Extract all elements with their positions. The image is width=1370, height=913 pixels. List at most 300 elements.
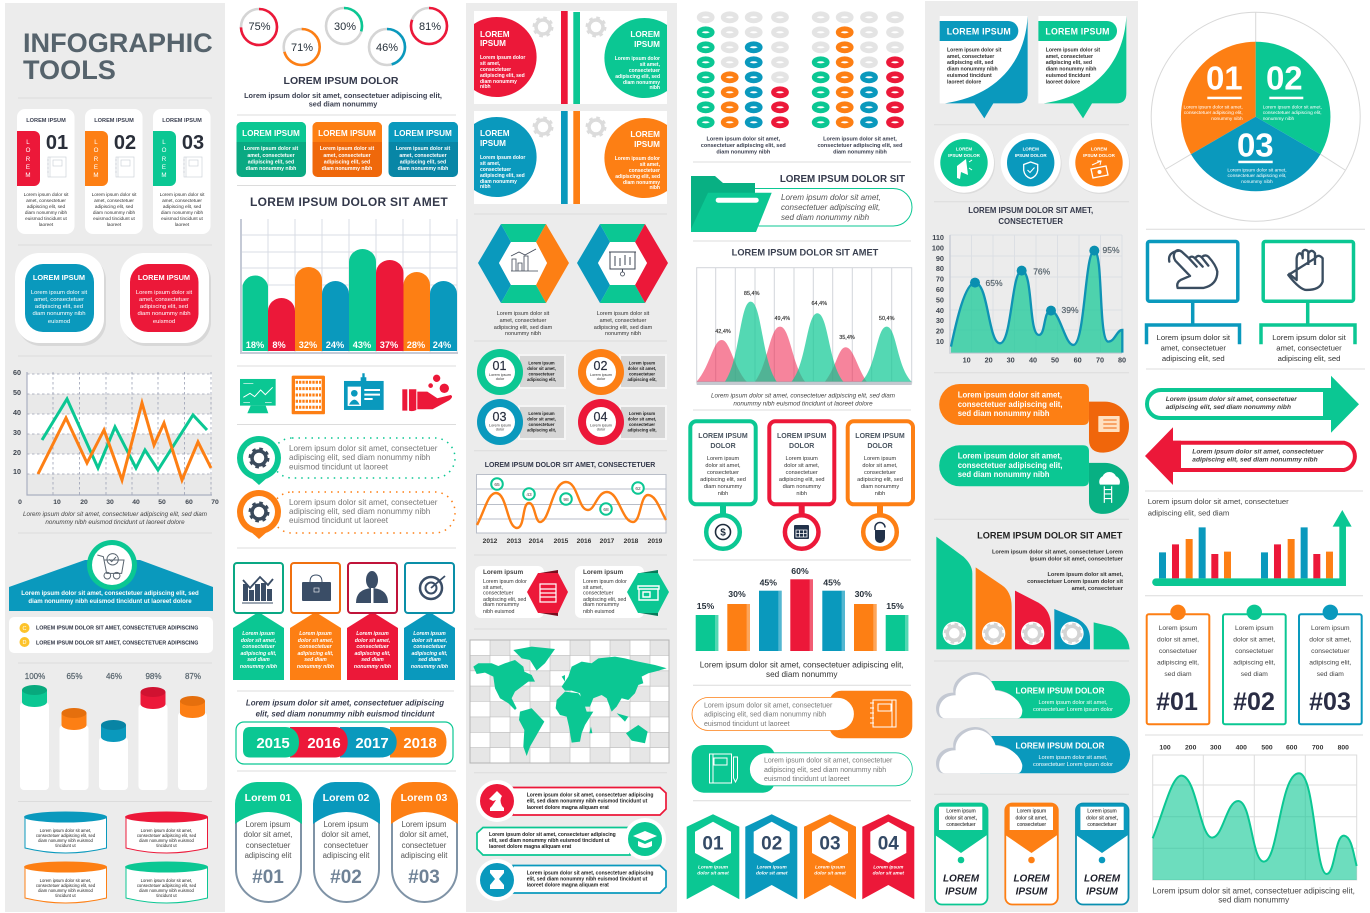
tag: red person: adipiscing elit, xyxy=(354,651,391,657)
drum: orange xyxy=(24,862,107,903)
card 03: diam nonummy nibh xyxy=(161,210,203,215)
pin card: green dollar: Lorem ipsum xyxy=(707,456,739,462)
card 03: E xyxy=(162,164,166,171)
round badge: money: IPSUM DOLOR xyxy=(1083,153,1116,158)
pin card: red calendar xyxy=(769,421,834,549)
line chart: 60 xyxy=(185,499,193,506)
speech card: blue: euismod tincidunt xyxy=(947,73,992,79)
gear panel: red and green: adipiscing elit, sed xyxy=(615,74,660,80)
number badge 04: dolor sit amet, xyxy=(628,416,656,422)
arrow callout: green right xyxy=(1147,376,1359,433)
tag: red person: nonummy nibh xyxy=(354,664,391,670)
area chart xyxy=(1153,744,1357,880)
pin callout: orange xyxy=(237,490,455,539)
speech card: blue xyxy=(940,16,1028,118)
speech card: green: amet, consectetuer xyxy=(1046,54,1093,60)
card 03: 03 xyxy=(182,132,204,154)
gear panel: blue and orange: adipiscing elit, sed xyxy=(480,173,525,179)
cloud banner: blue: LOREM IPSUM DOLOR xyxy=(1016,741,1105,750)
number badge 01: adipiscing elit, xyxy=(527,377,556,382)
hex card: red xyxy=(475,566,568,618)
tag: red person: sed diam xyxy=(361,657,384,663)
ring caption left: diam nonummy nibh xyxy=(716,150,771,156)
ring values: 81% xyxy=(419,21,441,33)
number card 01: adipiscing elit, xyxy=(1157,660,1199,667)
peaks area chart xyxy=(932,233,1126,364)
heading: wave chart: LOREM IPSUM DOLOR SIT AMET, CONSECTETUER xyxy=(485,462,655,469)
capsule card 03: adipiscing elit xyxy=(401,851,448,860)
info card: green: LOREM IPSUM xyxy=(242,129,300,138)
speech card: green: Lorem ipsum dolor sit xyxy=(1046,48,1100,54)
card 03: adipiscing elit, sed xyxy=(163,204,202,209)
capsule card 02: adipiscing elit xyxy=(323,851,370,860)
pin card: green dollar: diam nonummy xyxy=(704,484,742,490)
info card: green xyxy=(236,122,306,177)
card 01: euismod tincidunt ut xyxy=(25,216,68,221)
card 01 xyxy=(17,109,74,234)
info card: green: diam nonummy nibh xyxy=(246,166,296,172)
number card 01 xyxy=(1147,605,1209,724)
progress rings xyxy=(241,8,447,65)
gear panel: red and green xyxy=(474,11,667,104)
bell curve chart: 64,4% xyxy=(811,301,827,307)
legend list: LOREM IPSUM DOLOR SIT AMET, CONSECTETUER ADIPISCING xyxy=(36,626,198,632)
tag: green chart: adipiscing elit, xyxy=(240,651,277,657)
bookmark card: green: consectetuer xyxy=(946,822,976,828)
symmetric bar chart: 30% xyxy=(855,589,872,599)
round badge: megaphone: IPSUM DOLOR xyxy=(948,153,981,158)
rounded square: blue: amet, consectetuer xyxy=(34,297,84,303)
ring caption: Lorem ipsum dolor sit amet, consectetuer adipiscing elit, xyxy=(244,91,442,100)
folder callout: Lorem ipsum dolor sit amet, xyxy=(781,193,881,202)
banner row: green graduation: Lorem ipsum dolor sit amet, consectetuer adipiscing xyxy=(489,832,616,838)
cylinder chart: 98% xyxy=(145,672,162,681)
tag: orange briefcase xyxy=(290,563,341,680)
gear panel: red and green: diam nonummy xyxy=(623,80,660,86)
pin card: green dollar: LOREM IPSUM xyxy=(698,433,748,440)
number badge 03: adipiscing elit, xyxy=(527,428,556,432)
pin callout: orange: euismod tincidunt ut laoreet xyxy=(289,516,389,525)
drum: blue: diam nonummy nibh euismod xyxy=(38,838,94,843)
number card 01: consectetuer xyxy=(1159,648,1198,655)
legend list: C xyxy=(23,626,27,632)
ribbon 02 xyxy=(745,814,797,899)
stepped chart text: Lorem ipsum dolor sit amet, consectetuer Lorem xyxy=(992,549,1123,555)
hex card: green: sit amet, xyxy=(583,585,603,591)
line chart: 30 xyxy=(13,428,21,437)
pie infographic: consectetuer adipiscing elit, xyxy=(1228,173,1286,179)
ribbon 01 xyxy=(687,814,739,899)
card 02 xyxy=(85,109,142,234)
speech card: blue: amet, consectetuer xyxy=(947,54,994,60)
year timeline: 2016 xyxy=(307,735,341,752)
year timeline xyxy=(236,722,453,764)
banner row: blue hourglass: laoreet dolore magna aliquam erat xyxy=(527,883,609,889)
peaks area chart: 76% xyxy=(1033,266,1051,276)
number card 02: adipiscing elit, xyxy=(1233,660,1275,667)
gear panel: blue and orange: LOREM xyxy=(630,130,660,139)
number card 03: #03 xyxy=(1309,688,1351,716)
drum: green: tincidunt ut xyxy=(156,893,177,898)
ribbon 01: dolor sit amet xyxy=(697,870,729,876)
hex card: red: Lorem ipsum xyxy=(483,569,523,576)
info card: orange: Lorem ipsum dolor sit xyxy=(320,146,375,152)
rounded square: red: diam nonummy nibh xyxy=(137,311,191,317)
timeline caption: Lorem ipsum dolor sit amet, consectetuer adipiscing xyxy=(246,698,444,708)
hex card: green: nibh euismod xyxy=(583,609,615,615)
drum: red: tincidunt ut xyxy=(156,843,177,848)
hexagon caption right: adipiscing elit, sed diam xyxy=(594,325,653,331)
capsule card 02: dolor sit amet, xyxy=(322,830,370,839)
stepped chart text: consectetuer Lorem ipsum dolor sit xyxy=(1027,579,1123,585)
number badge 04: 04 xyxy=(594,410,607,424)
number card 03: Lorem ipsum xyxy=(1311,625,1350,632)
number card 02: Lorem ipsum xyxy=(1235,625,1274,632)
peaks area chart: 39% xyxy=(1061,305,1079,315)
bell curve chart: 85,4% xyxy=(744,291,760,297)
pin card: red calendar: dolor sit amet, xyxy=(784,463,820,469)
pin card: green dollar: adipiscing elit, sed xyxy=(700,477,746,483)
rounded bar chart: 18% xyxy=(246,340,264,350)
ring values: 71% xyxy=(291,42,313,54)
tag: green chart: nonummy nibh xyxy=(240,664,277,670)
monitor: pointing hand: amet, consectetuer xyxy=(1161,344,1226,352)
pin card: orange lock: Lorem ipsum xyxy=(864,456,896,462)
banner: orange: Lorem ipsum dolor sit amet, xyxy=(958,390,1062,399)
pin card: green dollar: consectetuer xyxy=(707,470,739,476)
drum: red: consectetuer adipiscing elit, sed xyxy=(137,833,197,838)
drum: blue xyxy=(24,812,107,853)
gear panel: blue and orange: nibh xyxy=(480,184,491,190)
pin callout: green xyxy=(237,436,455,485)
line chart: 70 xyxy=(211,499,219,506)
gear panel: red and green: sit amet, xyxy=(640,62,661,68)
number card 02: sed diam xyxy=(1241,671,1268,678)
hex card: red: consectetuer xyxy=(483,590,514,596)
round badge: megaphone xyxy=(934,133,995,194)
hexagon caption left: Lorem ipsum dolor sit xyxy=(497,311,550,317)
capsule card 03: Lorem 03 xyxy=(401,792,448,804)
cloud banner: green xyxy=(936,672,1130,718)
gear panel: red and green: LOREM xyxy=(480,30,510,39)
peaks area chart: 65% xyxy=(985,278,1003,288)
number badge 02: Lorem ipsum xyxy=(629,360,655,366)
rounded bar chart: 32% xyxy=(299,340,317,350)
symmetric bar chart: 45% xyxy=(823,578,841,588)
bell chart caption: Lorem ipsum dolor sit amet, consectetuer adipiscing elit, sed diam xyxy=(711,392,895,399)
rounded square: blue: Lorem ipsum dolor sit xyxy=(31,290,88,296)
wave chart: 62 xyxy=(635,486,641,492)
pie infographic: 02 xyxy=(1266,59,1303,96)
line chart: 40 xyxy=(132,499,140,506)
hex card: green: adipiscing elit, sed xyxy=(583,597,626,603)
speech card: blue: laoreet dolore xyxy=(947,80,981,86)
area chart: 200 xyxy=(1185,744,1197,751)
arrow callout: green right: Lorem ipsum dolor sit amet, consectetuer xyxy=(1166,396,1297,403)
gear panel: red and green: IPSUM xyxy=(480,39,506,48)
line chart: 10 xyxy=(13,467,21,476)
hexagon caption right: amet, consectetuer xyxy=(600,318,647,324)
number badge 02: consectetuer xyxy=(629,372,655,376)
gear panel: red and green: consectetuer xyxy=(629,68,660,74)
peaks area chart: 95% xyxy=(1102,245,1120,255)
ring caption right: Lorem ipsum dolor sit amet, xyxy=(823,137,897,143)
monitor: pointing hand: Lorem ipsum dolor sit xyxy=(1157,333,1231,342)
round badge: megaphone: LOREM xyxy=(956,146,972,152)
rounded square: red: amet, consectetuer xyxy=(139,297,189,303)
number card 02: #02 xyxy=(1233,688,1275,716)
number card 01: #01 xyxy=(1156,688,1198,716)
number badge 02: dolor xyxy=(597,377,606,381)
cloud banner: green: Lorem ipsum dolor sit amet, xyxy=(1038,700,1108,706)
peaks area chart: 40 xyxy=(936,306,944,315)
peaks area chart: 100 xyxy=(932,243,944,252)
line chart: 60 xyxy=(13,368,21,377)
number badge 01: 01 xyxy=(493,359,506,373)
card 02: 02 xyxy=(114,132,136,154)
folder callout: consectetuer adipiscing elit, xyxy=(781,203,880,212)
card 03 xyxy=(153,109,210,234)
cylinder chart: 87% xyxy=(185,672,201,681)
peaks area chart: 80 xyxy=(936,264,944,273)
symmetric bar chart: 30% xyxy=(728,589,746,599)
hex card: red: diam nonummy xyxy=(483,602,520,608)
pin card: orange lock: adipiscing elit, sed xyxy=(857,477,903,483)
peaks area chart: 80 xyxy=(1118,355,1126,364)
pin card: red calendar: consectetuer xyxy=(786,470,818,476)
title: INFOGRAPHIC xyxy=(23,27,213,58)
number card 03: consectetuer xyxy=(1311,648,1350,655)
panel: column 1 xyxy=(5,3,225,912)
rounded square: red xyxy=(120,253,211,346)
number card 01: sed diam xyxy=(1164,671,1192,678)
number badge 04: Lorem ipsum xyxy=(629,411,655,416)
number badge 03: Lorem ipsum xyxy=(489,424,511,428)
number card 03 xyxy=(1299,605,1362,724)
tag: orange briefcase: Lorem ipsum xyxy=(299,631,332,637)
icon: abacus xyxy=(292,376,325,414)
line chart: 20 xyxy=(13,448,21,457)
tag: orange briefcase: dolor sit amet, xyxy=(298,638,333,644)
banner row: blue hourglass xyxy=(476,859,666,901)
info card: green: Lorem ipsum dolor sit xyxy=(244,146,299,152)
hex card: green: diam nonummy xyxy=(583,602,620,608)
gear panel: blue and orange: IPSUM xyxy=(634,140,660,149)
bookmark card: blue: LOREM xyxy=(1084,874,1121,885)
hexagon caption right: Lorem ipsum dolor sit xyxy=(597,311,650,317)
area chart: 800 xyxy=(1338,744,1349,751)
banner: green: consectetuer adipiscing elit, xyxy=(958,461,1063,470)
pin card: red calendar: adipiscing elit, sed xyxy=(779,477,825,483)
card 02: R xyxy=(94,156,99,163)
legend list: D xyxy=(23,640,27,646)
speech card: green: laoreet dolore xyxy=(1046,80,1080,86)
bookmark card: blue: Lorem ipsum xyxy=(1087,809,1117,815)
tag: red person: consectetuer xyxy=(356,644,390,650)
capsule card 01 xyxy=(235,782,302,902)
pin card: orange lock xyxy=(848,421,913,549)
peaks area chart: 60 xyxy=(936,285,944,294)
note pill: orange: Lorem ipsum dolor sit amet, consectetuer xyxy=(704,703,833,710)
ribbon 03: Lorem ipsum xyxy=(815,864,846,870)
speech card: blue: adipiscing elit, sed xyxy=(947,60,993,66)
tag: blue target xyxy=(404,563,455,680)
note pill: green: euismod tincidunt ut laoreet xyxy=(764,776,850,783)
peaks area chart: 50 xyxy=(936,295,944,304)
line chart: 50 xyxy=(158,499,166,506)
rounded square: red: euismod xyxy=(153,319,175,325)
peaks area chart: 10 xyxy=(963,355,971,364)
card 01: adipiscing elit, sed xyxy=(27,204,66,209)
pie infographic: 03 xyxy=(1237,127,1274,164)
stepped chart text: amet, consectetuer xyxy=(1072,586,1124,592)
rounded bar chart: 24% xyxy=(433,340,451,350)
ring caption: sed diam nonummy xyxy=(309,100,378,108)
pin card: orange lock: LOREM IPSUM xyxy=(855,433,905,440)
info card: orange: amet, consectetuer xyxy=(323,153,371,159)
banner row: red knight: laoreet dolore magna aliquam erat xyxy=(527,805,609,811)
drum: red: diam nonummy nibh euismod xyxy=(139,838,195,843)
monitor: pointing hand: adipiscing elit, sed xyxy=(1162,354,1225,363)
bookmark card: blue: dolor sit amet, xyxy=(1086,816,1118,822)
speech card: blue: Lorem ipsum dolor sit xyxy=(947,48,1002,54)
stepped chart text: Lorem ipsum dolor sit amet, xyxy=(1047,572,1123,578)
card 03: O xyxy=(162,147,167,154)
banner row: blue hourglass: Lorem ipsum dolor sit amet, consectetuer adipiscing xyxy=(527,870,653,876)
wave chart: 2018 xyxy=(624,538,639,545)
card 02: adipiscing elit, sed xyxy=(95,204,134,209)
hex card: green: Lorem ipsum xyxy=(583,569,623,576)
tag: blue target: Lorem ipsum xyxy=(413,631,446,637)
drum: orange: tincidunt ut xyxy=(55,893,76,898)
ribbon 04: 04 xyxy=(878,833,899,854)
number badge 02: Lorem ipsum xyxy=(590,373,612,377)
number card 01: Lorem ipsum xyxy=(1159,625,1198,632)
pie infographic: Lorem ipsum dolor sit amet, xyxy=(1263,105,1322,111)
wave chart: 43 xyxy=(526,492,532,498)
round badge: shield: IPSUM DOLOR xyxy=(1015,153,1047,158)
number badge 03: dolor xyxy=(496,428,505,432)
info card: blue: amet, consectetuer xyxy=(399,153,447,159)
year timeline: 2017 xyxy=(355,735,389,752)
number badge 01: dolor sit amet, xyxy=(527,366,556,371)
legend list xyxy=(9,617,213,653)
chart caption: nonummy nibh euismod tincidunt ut laoreet dolore xyxy=(45,519,185,526)
capsule card 01: #01 xyxy=(252,867,284,888)
pie infographic xyxy=(1151,12,1360,221)
bookmark card: blue xyxy=(1076,804,1128,904)
pin callout: green: euismod tincidunt ut laoreet xyxy=(289,462,389,472)
symmetric bar chart: 15% xyxy=(697,601,714,611)
rounded bar chart: 37% xyxy=(380,340,398,350)
info card: orange xyxy=(312,122,382,177)
bookmark card: green xyxy=(935,804,988,904)
wave chart: 2015 xyxy=(554,538,569,545)
gear panel: blue and orange xyxy=(474,111,667,204)
cloud banner: blue: Lorem ipsum dolor sit amet, xyxy=(1038,755,1108,761)
round badge: shield: LOREM xyxy=(1023,146,1039,152)
pin card: orange lock: DOLOR xyxy=(867,443,893,450)
capsule card 01: consectetuer xyxy=(246,841,291,850)
gear panel: blue and orange: IPSUM xyxy=(480,139,506,148)
bell curve chart: 50,4% xyxy=(879,316,895,322)
hexagon caption left: nonummy nibh xyxy=(505,331,541,337)
peaks area chart: 30 xyxy=(1007,355,1015,364)
card 02: amet, consectetuer xyxy=(94,198,134,203)
wave chart: 2017 xyxy=(600,538,615,545)
cylinder chart xyxy=(20,672,207,790)
capsule card 01: Lorem ipsum xyxy=(245,820,291,829)
wave chart: 2014 xyxy=(529,538,544,545)
number badge 03: 03 xyxy=(493,410,506,424)
pin card: red calendar: LOREM IPSUM xyxy=(777,433,827,440)
tag: green chart xyxy=(233,563,284,680)
gear panel: red and green: nibh xyxy=(649,85,660,91)
ribbon 03: 03 xyxy=(819,833,841,854)
capsule card 03: #03 xyxy=(408,867,440,888)
tag: orange briefcase: consectetuer xyxy=(299,644,333,650)
speech card: green: adipiscing elit, sed xyxy=(1046,60,1092,66)
hexagon with presentation icon xyxy=(577,224,668,303)
number badge 04: dolor xyxy=(597,428,606,432)
ring caption left: Lorem ipsum dolor sit amet, xyxy=(706,137,781,143)
pin card: orange lock: diam nonummy xyxy=(861,484,899,490)
number badge 02: dolor sit amet, xyxy=(628,366,656,371)
ring chart left xyxy=(699,14,786,126)
monitor: open hand: Lorem ipsum dolor sit xyxy=(1272,333,1347,342)
bell curve chart: 49,4% xyxy=(774,316,790,322)
drum: green: Lorem ipsum dolor sit amet, xyxy=(141,878,192,883)
gear panel: blue and orange: Lorem ipsum dolor xyxy=(480,155,525,161)
peaks area chart: 20 xyxy=(936,327,944,336)
pie infographic: nonummy nibh xyxy=(1241,179,1273,185)
title: TOOLS xyxy=(23,54,116,85)
round badge: money xyxy=(1069,133,1130,194)
info card: blue: LOREM IPSUM xyxy=(394,129,452,138)
round badge: shield xyxy=(1001,133,1062,194)
rounded bar chart: 24% xyxy=(326,340,344,350)
drum: orange: consectetuer adipiscing elit, sed xyxy=(36,883,96,888)
bell curve chart: 42,4% xyxy=(715,329,731,335)
cylinder chart: 65% xyxy=(66,672,83,681)
pin callout: green: Lorem ipsum dolor sit amet, consectetuer xyxy=(289,444,438,453)
pin card: green dollar: $ xyxy=(720,528,726,538)
bookmark card: orange: dolor sit amet, xyxy=(1016,816,1048,822)
card 01: E xyxy=(26,164,30,171)
wave chart xyxy=(476,474,666,545)
tag: red person: Lorem ipsum xyxy=(356,631,389,637)
number badge 03: dolor sit amet, xyxy=(527,416,556,422)
speech card: blue: diam nonummy nibh xyxy=(947,66,998,72)
panel: column 2 xyxy=(233,8,458,902)
card 02: Lorem ipsum dolor sit xyxy=(92,192,137,197)
card 01: diam nonummy nibh xyxy=(25,210,67,215)
note pill: green xyxy=(692,745,912,793)
peaks area chart: 40 xyxy=(1029,355,1037,364)
pin card: orange lock: dolor sit amet, xyxy=(862,463,898,469)
rounded square: red: Lorem ipsum dolor sit xyxy=(136,290,193,296)
rounded square: blue: euismod xyxy=(48,319,70,325)
pie infographic: nonummy nibh xyxy=(1211,116,1243,122)
number card 03: sed diam xyxy=(1317,671,1344,678)
capsule card 03: dolor sit amet, xyxy=(400,830,448,839)
card 02: LOREM IPSUM xyxy=(94,118,134,124)
note pill: green: adipiscing elit, sed diam nonummy nibh xyxy=(764,767,886,774)
card 01: amet, consectetuer xyxy=(26,198,66,203)
stepped chart text: ipsum dolor sit amet, consectetuer xyxy=(1030,556,1124,562)
gear panel: blue and orange: nibh xyxy=(649,185,660,191)
ribbon 04: Lorem ipsum xyxy=(873,864,904,870)
